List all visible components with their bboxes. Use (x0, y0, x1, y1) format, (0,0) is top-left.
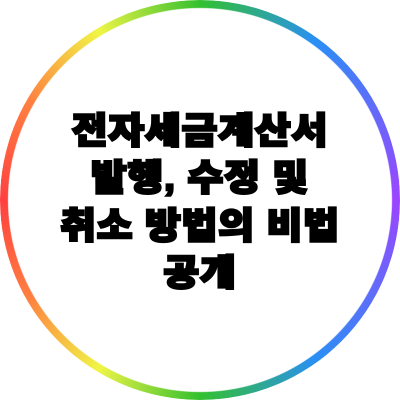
title: 공개 (163, 252, 237, 293)
title: 전자세금계산서 (72, 110, 328, 150)
title: 발행, 수정 및 (91, 157, 309, 198)
title (60, 110, 340, 293)
title: 취소 방법의 비법 (60, 204, 340, 246)
